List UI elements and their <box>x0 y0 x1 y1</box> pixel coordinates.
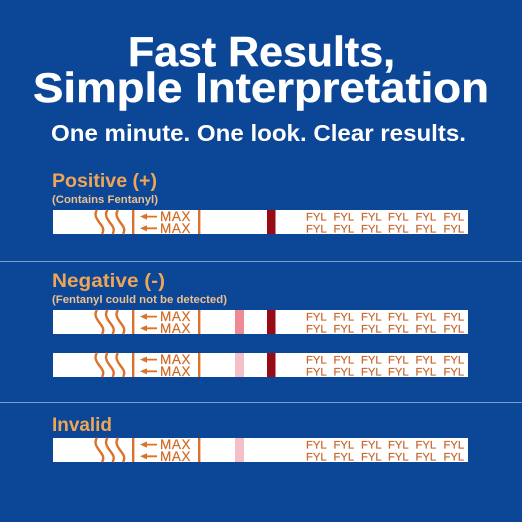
test strip: negative, faint test line: FYL <box>334 354 354 366</box>
test strip: invalid: FYL <box>306 440 327 452</box>
subtitle: One minute. One look. Clear results. <box>51 120 466 146</box>
test strip: positive: FYL <box>306 212 327 224</box>
test strip: invalid: FYL <box>416 452 436 464</box>
test strip: negative, strong test line: MAX <box>160 309 190 324</box>
test strip: negative, faint test line: FYL <box>306 366 327 378</box>
test strip: negative, strong test line: FYL <box>361 324 382 336</box>
test strip: invalid: FYL <box>444 452 464 464</box>
test strip: negative, strong test line: FYL <box>416 312 436 324</box>
test strip: negative, strong test line <box>53 309 468 336</box>
heading: invalid: Invalid <box>52 414 112 436</box>
test strip: negative, faint test line: FYL <box>388 354 409 366</box>
test strip: positive: FYL <box>416 224 436 236</box>
test strip: negative, faint test line: MAX <box>160 352 190 367</box>
heading: negative <box>52 270 227 306</box>
test strip: negative, strong test line: FYL <box>444 312 464 324</box>
test strip: negative, faint test line: FYL <box>334 366 354 378</box>
test strip: positive: FYL <box>444 224 464 236</box>
test strip: positive: FYL <box>361 212 382 224</box>
test strip: positive: MAX <box>160 221 190 236</box>
test strip: negative, faint test line: FYL <box>416 354 436 366</box>
test strip: positive <box>53 209 468 236</box>
test strip: positive: MAX <box>160 209 190 224</box>
test strip: negative, faint test line: FYL <box>361 354 382 366</box>
heading: negative: Negative (-) <box>52 270 165 292</box>
test strip: positive: FYL <box>444 212 464 224</box>
test strip: positive: FYL <box>334 212 354 224</box>
test strip: invalid: FYL <box>334 440 354 452</box>
heading: positive: Positive (+) <box>52 170 157 192</box>
test strip: invalid <box>53 437 468 464</box>
test strip: negative, strong test line: FYL <box>361 312 382 324</box>
test strip: negative, faint test line: FYL <box>444 366 464 378</box>
test strip: negative, faint test line: FYL <box>416 366 436 378</box>
test strip: negative, faint test line: FYL <box>444 354 464 366</box>
test strip: positive: FYL <box>388 212 409 224</box>
test strip: negative, faint test line: FYL <box>361 366 382 378</box>
test strip: invalid: FYL <box>334 452 354 464</box>
test strip: invalid: FYL <box>388 440 409 452</box>
test strip: negative, strong test line: FYL <box>306 312 327 324</box>
test strip: invalid: FYL <box>306 452 327 464</box>
test strip: negative, strong test line: FYL <box>388 324 409 336</box>
test strip: invalid: FYL <box>444 440 464 452</box>
test strip: positive: FYL <box>388 224 409 236</box>
test strip: negative, strong test line: FYL <box>444 324 464 336</box>
test strip: negative, strong test line: FYL <box>388 312 409 324</box>
title <box>33 28 489 111</box>
test strip: negative, faint test line: FYL <box>388 366 409 378</box>
test strip: negative, faint test line: MAX <box>160 364 190 379</box>
heading: positive <box>52 170 158 206</box>
test strip: invalid: MAX <box>160 437 190 452</box>
test strip: invalid: FYL <box>361 452 382 464</box>
test strip: invalid: FYL <box>416 440 436 452</box>
test strip: negative, strong test line: FYL <box>306 324 327 336</box>
test strip: negative, strong test line: FYL <box>416 324 436 336</box>
test strip: positive: FYL <box>306 224 327 236</box>
test strip: negative, strong test line: FYL <box>334 324 354 336</box>
heading: negative: (Fentanyl could not be detected) <box>52 294 227 306</box>
test strip: positive: FYL <box>416 212 436 224</box>
test strip: negative, faint test line: FYL <box>306 354 327 366</box>
test strip: invalid: FYL <box>361 440 382 452</box>
title: Simple Interpretation <box>33 64 489 111</box>
heading: positive: (Contains Fentanyl) <box>52 194 158 206</box>
test strip: negative, strong test line: MAX <box>160 321 190 336</box>
test strip: invalid: FYL <box>388 452 409 464</box>
title: Fast Results, <box>128 28 395 75</box>
test strip: positive: FYL <box>334 224 354 236</box>
test strip: negative, faint test line <box>53 352 468 379</box>
test strip: negative, strong test line: FYL <box>334 312 354 324</box>
test strip: invalid: MAX <box>160 449 190 464</box>
test strip: positive: FYL <box>361 224 382 236</box>
